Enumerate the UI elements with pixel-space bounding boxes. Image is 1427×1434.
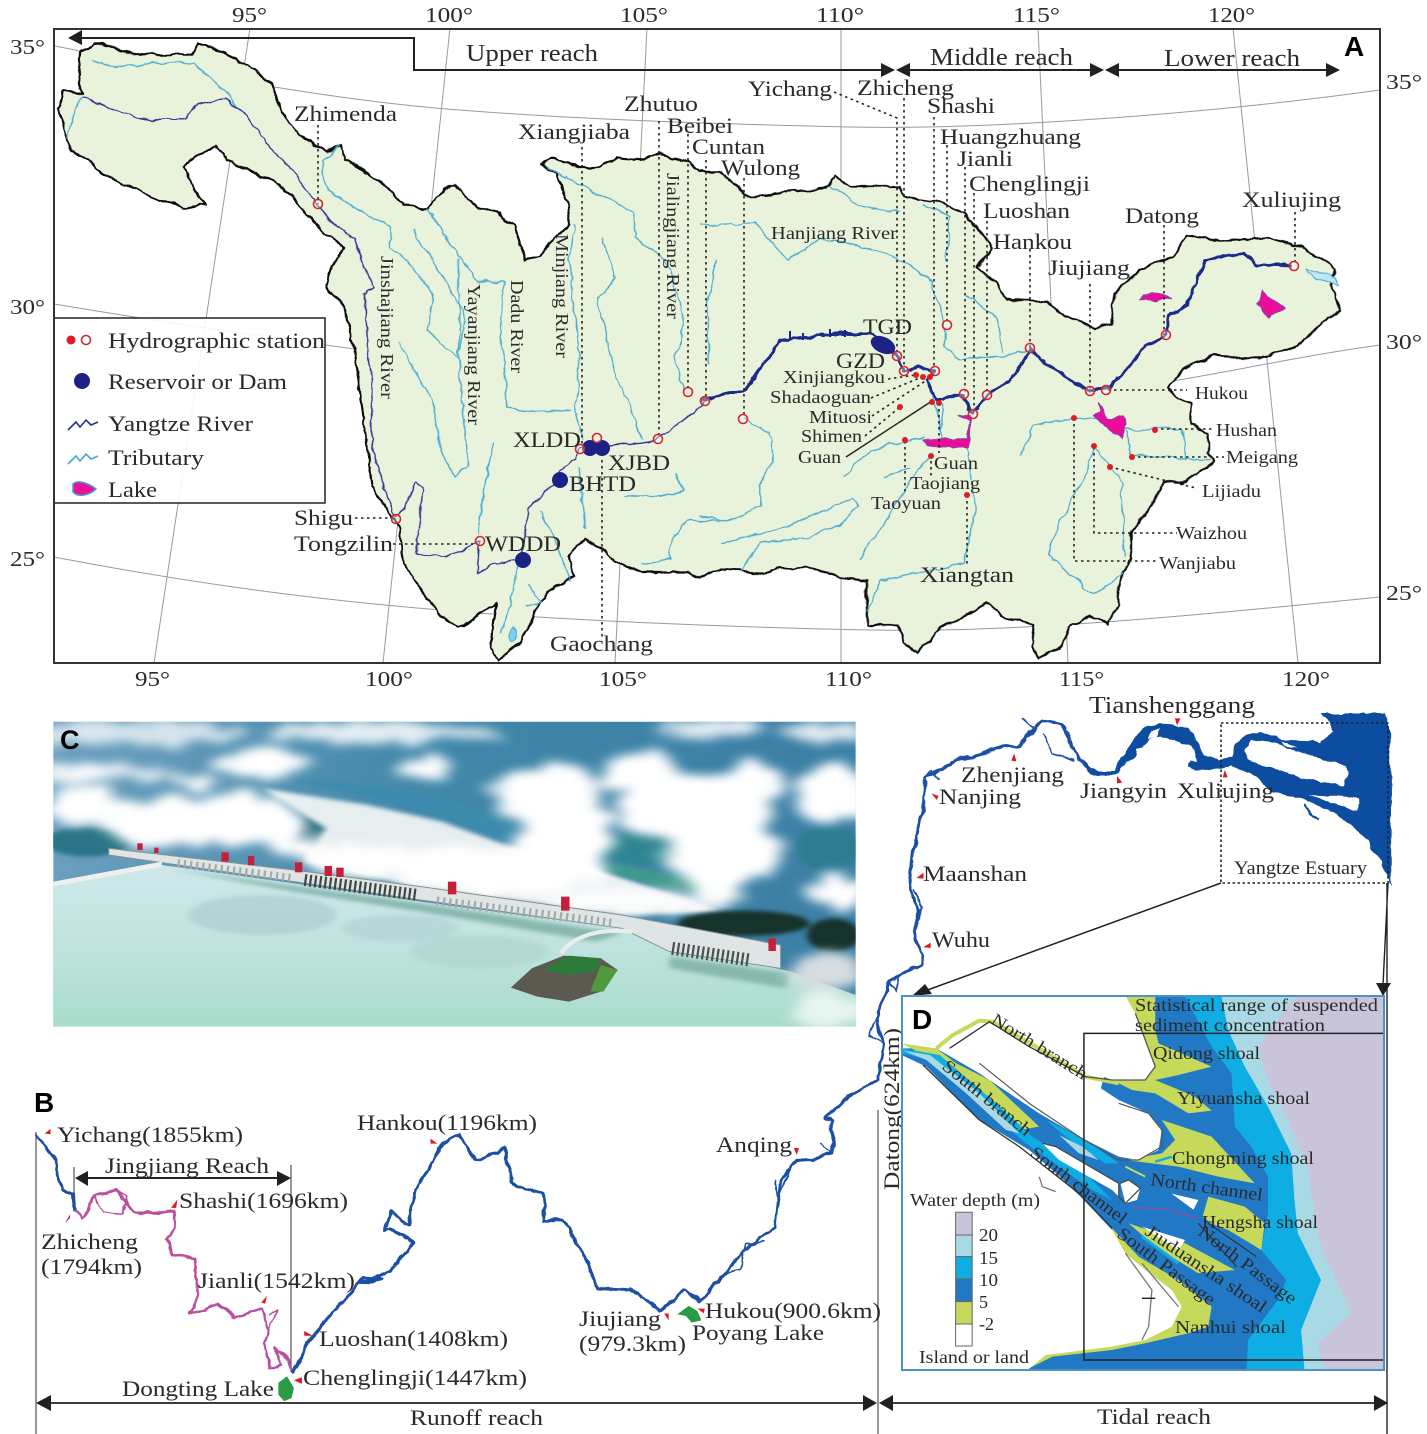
graticule lines <box>54 28 1380 663</box>
panel B labels: Jianli(1542km) <box>198 1268 355 1293</box>
panel D labels: 20 <box>979 1225 998 1245</box>
panel D labels: Nanhui shoal <box>1175 1317 1286 1337</box>
station labels: Xiangjiaba <box>518 119 630 144</box>
depth zones <box>1026 997 1384 1370</box>
station labels: Xuliujing <box>1242 187 1341 212</box>
river name labels: Jinshajiang River <box>377 256 397 399</box>
Yangtze middle and lower reach <box>700 254 1293 414</box>
basin outline and river network <box>57 43 1342 661</box>
coordinate labels: 110° <box>825 667 872 691</box>
lower reach labels <box>923 693 1368 952</box>
panel B labels: Yichang(1855km) <box>57 1122 243 1147</box>
panel D labels: Qidong shoal <box>1153 1043 1260 1063</box>
basin east part <box>699 171 1342 657</box>
Jingjiang reach arrow <box>75 1171 291 1186</box>
coordinate labels: 30° <box>10 295 45 319</box>
coordinate labels: 115° <box>1013 3 1060 27</box>
shoals <box>1029 997 1265 1368</box>
station labels: Zhimenda <box>294 101 397 126</box>
reach headings: Upper reach <box>466 41 598 67</box>
photo green valley fields <box>601 862 696 890</box>
station labels: Zhutuo <box>624 91 698 116</box>
panel D labels: sediment concentration <box>1135 1015 1325 1035</box>
photo red gantry cranes <box>137 843 776 951</box>
panel B labels: Xuliujing <box>904 1073 929 1171</box>
station labels: XJBD <box>608 450 670 475</box>
panel B labels: Anqing <box>716 1132 792 1157</box>
panel B labels: Jingjiang Reach <box>105 1153 269 1178</box>
panel B labels: Shashi(1696km) <box>179 1188 348 1213</box>
coordinate labels: 120° <box>1208 3 1255 27</box>
photo right shore forest <box>677 911 860 952</box>
lakes <box>923 288 1285 448</box>
tributary station labels: Guan <box>934 453 978 473</box>
river name labels: Hanjiang River <box>771 223 897 243</box>
coordinate labels: 25° <box>10 547 45 571</box>
station labels: TGD <box>863 314 912 339</box>
reach headings <box>466 41 1300 72</box>
station markers <box>916 718 1228 948</box>
land areas <box>902 996 1198 1370</box>
tributary station labels: Guan <box>798 447 841 467</box>
photo island <box>511 956 618 1002</box>
panel D labels: -2 <box>979 1314 994 1334</box>
photo clouds <box>24 721 871 913</box>
panel D labels: Jiuduansha shoal <box>1142 1221 1271 1317</box>
photo lower right mist <box>791 953 865 1028</box>
river course middle reach <box>37 1080 878 1375</box>
station labels: Shashi <box>927 93 995 118</box>
photo arch bridge <box>561 931 632 953</box>
inset connector arrows <box>912 883 1391 1434</box>
station labels: Chenglingji <box>969 171 1090 196</box>
tributary station labels <box>770 367 1298 573</box>
station labels: Beibei <box>667 113 733 138</box>
north branch channel <box>936 1021 1119 1083</box>
station labels: Hankou <box>993 229 1072 254</box>
station labels: WDDD <box>485 531 561 556</box>
reach arrows <box>68 30 1340 77</box>
photo dam <box>53 848 781 968</box>
tributary station labels: Wanjiabu <box>1159 553 1236 573</box>
photo reflections <box>167 868 791 988</box>
panel letter A: A <box>1344 31 1364 62</box>
estuary inset box <box>1221 723 1388 883</box>
lower reach labels: Zhenjiang <box>961 762 1064 787</box>
lower reach labels: Wuhu <box>932 927 990 952</box>
panel letter B: B <box>34 1087 54 1118</box>
panel D labels: Water depth (m) <box>910 1190 1040 1211</box>
coordinate labels <box>10 3 1422 691</box>
photo mountains background <box>53 722 856 1027</box>
south branch channel <box>902 1043 1255 1263</box>
station labels: Tongzilin <box>294 531 393 556</box>
station labels: Huangzhuang <box>940 124 1081 149</box>
river name labels: Jialingjiang River <box>663 173 683 319</box>
panel B labels: Runoff reach <box>410 1405 543 1430</box>
panel B labels: (1794km) <box>41 1254 142 1279</box>
panel D labels <box>910 995 1378 1367</box>
tributaries east <box>700 186 1337 612</box>
Dongting and Poyang lakes <box>278 1306 701 1401</box>
tributary station labels: Shadaoguan <box>770 387 871 407</box>
panel D frame <box>902 996 1384 1370</box>
leader lines <box>318 92 1295 637</box>
panel D labels: Yiyuansha shoal <box>1177 1088 1310 1108</box>
panel: lower reach and estuary <box>869 693 1391 1434</box>
legend: Lake <box>108 477 157 502</box>
map frame <box>54 29 1380 663</box>
tributary station labels: Taoyuan <box>871 493 941 513</box>
hydrographic stations <box>314 200 1298 546</box>
tributary station labels: Shimen <box>801 426 862 446</box>
panel B labels: Hukou(900.6km) <box>705 1298 881 1323</box>
estuary water <box>1081 714 1391 885</box>
station labels: Zhicheng <box>857 75 954 100</box>
lower reach labels: Xuliujing <box>1177 778 1274 803</box>
reach headings: Lower reach <box>1164 46 1300 72</box>
lower reach labels: Nanjing <box>939 784 1021 809</box>
panel D labels: 5 <box>979 1292 988 1312</box>
station labels: Shigu <box>294 505 353 530</box>
tributary station labels: Hukou <box>1195 383 1248 403</box>
river name labels: Dadu River <box>507 280 527 373</box>
coordinate labels: 100° <box>365 667 413 691</box>
station labels: Jianli <box>957 146 1013 171</box>
tributaries west <box>67 61 720 641</box>
panel B labels: Chenglingji(1447km) <box>303 1365 527 1390</box>
coordinate labels: 95° <box>232 3 267 27</box>
runoff and tidal reach arrows <box>36 1395 1388 1411</box>
reach boundary lines <box>36 1110 878 1434</box>
photo dark valley shadows <box>45 778 860 872</box>
panel B labels: Datong(624km) <box>879 1028 904 1190</box>
tributary station labels: Lijiadu <box>1202 481 1261 501</box>
basin west part <box>57 43 700 661</box>
statistical range frame <box>1084 1033 1384 1360</box>
panel D: estuary depth map <box>902 995 1384 1370</box>
lower reach labels: Jiangyin <box>1080 778 1167 803</box>
station labels: Yichang <box>748 76 832 101</box>
tributary station labels: Meigang <box>1226 447 1298 467</box>
panel D labels: Island or land <box>919 1347 1029 1367</box>
lower reach labels: Tianshenggang <box>1089 693 1255 719</box>
station labels <box>294 75 1341 656</box>
coordinate labels: 30° <box>1386 330 1422 354</box>
lower reach labels: Yangtze Estuary <box>1234 858 1368 879</box>
river name labels: Yayanjiang River <box>464 284 484 425</box>
station labels: Gaochang <box>550 631 653 656</box>
tributary station labels: Hushan <box>1216 420 1277 440</box>
legend <box>54 318 325 503</box>
coordinate labels: 115° <box>1059 667 1104 691</box>
tributary station labels: Mituosi <box>809 407 872 427</box>
coordinate labels: 95° <box>135 667 170 691</box>
panel D labels: Chongming shoal <box>1172 1148 1314 1168</box>
dams and reservoirs <box>515 329 898 568</box>
tidal river course <box>869 714 1391 1080</box>
photo downstream water <box>262 788 722 915</box>
panel D labels: 15 <box>979 1248 998 1268</box>
panel B: river course map <box>34 1028 1388 1434</box>
coordinate labels: 35° <box>10 35 45 59</box>
panel D labels: North channel <box>1149 1169 1264 1205</box>
panel C: dam photograph <box>24 721 871 1028</box>
panel B labels: Poyang Lake <box>692 1320 824 1345</box>
station labels: BHTD <box>569 471 636 496</box>
lower reach labels: Maanshan <box>923 861 1027 886</box>
estuary islands <box>1135 731 1358 812</box>
panel letter C: C <box>60 725 80 755</box>
station labels: Xiangtan <box>920 562 1014 587</box>
coordinate labels: 120° <box>1282 667 1330 691</box>
river name labels <box>377 173 897 425</box>
panel B labels: Dongting Lake <box>122 1376 274 1401</box>
panel B labels: (979.3km) <box>579 1331 686 1356</box>
panel B labels: Hankou(1196km) <box>357 1110 537 1135</box>
panel D labels: South channel <box>1027 1142 1131 1228</box>
panel D labels: North branch <box>988 1009 1091 1083</box>
panel B labels: Jiujiang <box>579 1306 661 1331</box>
coordinate labels: 110° <box>816 3 864 27</box>
reach headings: Middle reach <box>930 45 1073 71</box>
legend: Reservoir or Dam <box>108 369 287 394</box>
coordinate labels: 35° <box>1386 70 1422 94</box>
panel D labels: South branch <box>938 1056 1036 1140</box>
tributary station labels: Waizhou <box>1176 523 1247 543</box>
panel D labels: 10 <box>979 1270 998 1290</box>
panel letter D: D <box>912 1004 932 1035</box>
water depth color bar <box>956 1212 972 1346</box>
station labels: Luoshan <box>983 198 1070 223</box>
tributary station labels: Xinjiangkou <box>783 367 885 387</box>
coordinate labels: 105° <box>620 3 668 27</box>
panel B labels: Zhicheng <box>41 1229 138 1254</box>
station labels: Datong <box>1125 203 1199 228</box>
coordinate labels: 25° <box>1386 581 1422 605</box>
coordinate labels: 100° <box>425 3 473 27</box>
coordinate labels: 105° <box>599 667 647 691</box>
station labels: Cuntan <box>692 134 765 159</box>
panel D labels: South Passage <box>1114 1223 1219 1309</box>
panel B labels <box>41 1028 1211 1430</box>
river name labels: Minjiang River <box>552 234 572 358</box>
panel D labels: North Passage <box>1195 1221 1301 1308</box>
panel B labels: Luoshan(1408km) <box>319 1326 508 1351</box>
legend: Hydrographic station <box>108 328 325 353</box>
station markers <box>45 1129 799 1384</box>
panel B labels: Tidal reach <box>1097 1404 1211 1429</box>
panel A: basin map <box>10 3 1422 691</box>
legend: Tributary <box>108 445 204 470</box>
photo reservoir water <box>53 865 856 1027</box>
legend: Yangtze River <box>108 411 254 436</box>
station labels: Wulong <box>721 155 800 180</box>
panel D labels: Hengsha shoal <box>1202 1212 1318 1232</box>
tributary station labels: Taojiang <box>910 473 980 493</box>
station labels: XLDD <box>513 427 581 452</box>
station labels: Jiujiang <box>1048 255 1130 280</box>
station labels: GZD <box>836 348 885 373</box>
shoreline and training walls <box>923 1013 1256 1340</box>
Yangtze upper reach <box>83 96 716 572</box>
panel D labels: Statistical range of suspended <box>1135 995 1378 1015</box>
